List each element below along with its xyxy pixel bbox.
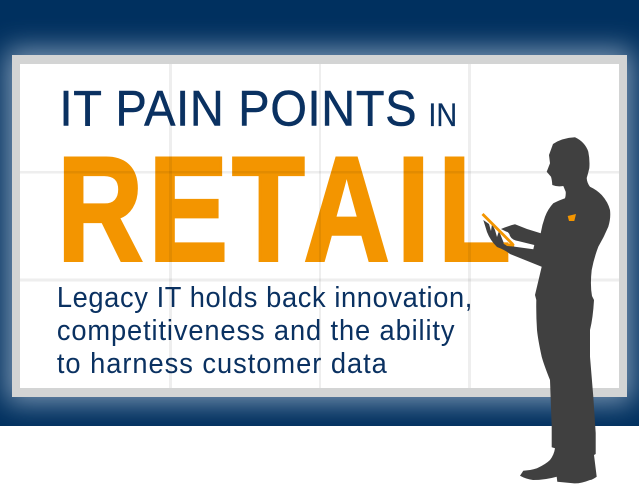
grey screen frame with glow [12, 55, 627, 397]
subtitle text: Legacy IT holds back innovation, [57, 281, 472, 313]
tablet lower edge [503, 243, 514, 246]
title: IT pain points in: IT PAIN POINTS [60, 81, 417, 137]
subtitle text [57, 281, 472, 379]
white screen panel [20, 64, 619, 388]
title: retail: RETAIL [57, 126, 511, 293]
subtitle text: to harness customer data [57, 347, 387, 379]
tablet [482, 214, 513, 244]
title: IT pain points in: IN [428, 98, 457, 133]
man body [483, 137, 610, 483]
silhouette of man holding a tablet [482, 137, 610, 483]
orange chest badge [568, 214, 576, 221]
subtitle text: competitiveness and the ability [57, 314, 454, 346]
